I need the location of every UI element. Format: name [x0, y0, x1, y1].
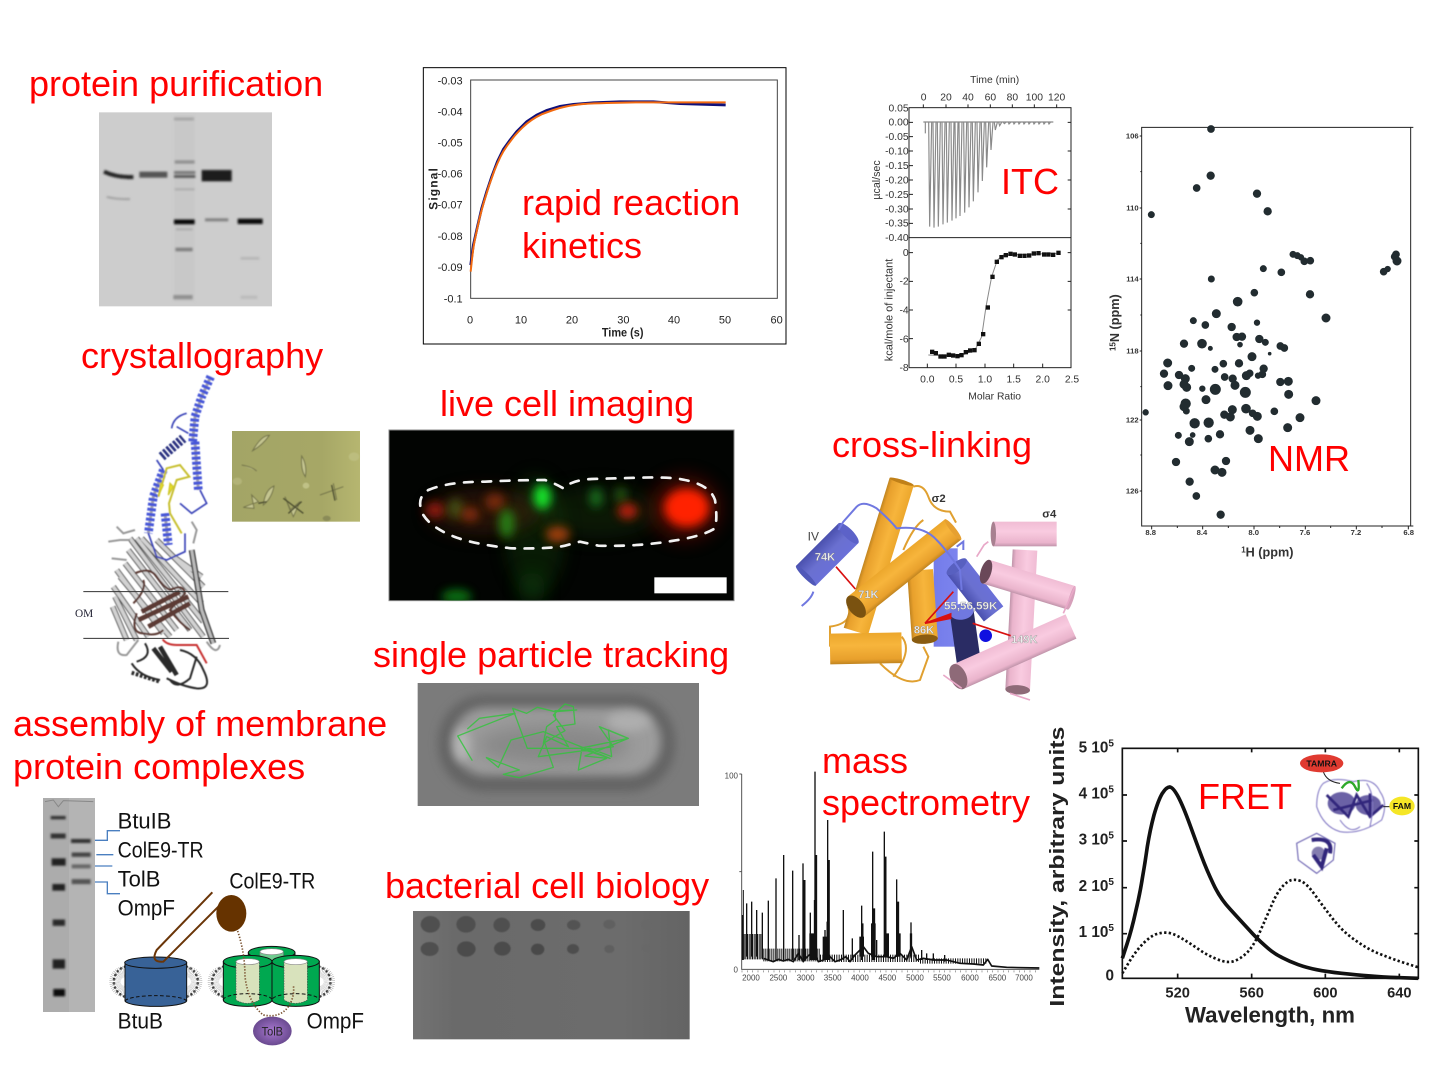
panel: rapid reaction kinetics chart: -0.07	[438, 200, 463, 212]
heading: crystallography: crystallography	[81, 335, 323, 376]
panel: rapid reaction kinetics chart: 50	[719, 314, 731, 326]
axis tick labels: 3 10	[1079, 831, 1108, 848]
panel: mass spectrum: 3000	[797, 974, 815, 983]
panel: mass spectrum: 5500	[933, 974, 951, 983]
panel: FRET emission spectra	[1047, 727, 1418, 1028]
panel: crystal structure ribbon	[75, 377, 229, 688]
panel: NMR HSQC spectrum: 106	[1126, 132, 1139, 141]
TolB	[253, 1017, 292, 1045]
panel: mass spectrum: 7000	[1015, 974, 1033, 983]
panel: ITC thermogram and binding isotherm: 0	[903, 248, 909, 259]
panel: mass spectrum: 100	[725, 772, 739, 781]
panel: NMR HSQC spectrum: 114	[1126, 275, 1139, 284]
panel: NMR HSQC spectrum: 118	[1126, 347, 1139, 356]
loop: yellow	[158, 465, 189, 533]
axis tick labels: 2 10	[1079, 878, 1108, 895]
axis tick labels: 4 10	[1079, 786, 1108, 803]
heading: assembly of membrane protein complexes: protein complexes	[13, 746, 305, 787]
panel: single particle tracking image	[418, 683, 699, 806]
panel: rapid reaction kinetics chart: 10	[515, 314, 527, 326]
panel: ITC thermogram and binding isotherm: kcal/mole of injectant	[883, 259, 895, 361]
panel: ITC thermogram and binding isotherm: 120	[1048, 93, 1066, 104]
BtuB barrel	[125, 957, 187, 1006]
domain: black lower	[132, 643, 207, 688]
panel: rapid reaction kinetics chart: -0.06	[438, 169, 463, 181]
TolB: TolB	[262, 1025, 283, 1039]
barrel: grey beta strands	[108, 522, 220, 655]
axis tick labels: 5	[1108, 877, 1114, 888]
curve: donor plus acceptor	[1122, 880, 1418, 973]
band labels: BtuIB	[118, 809, 171, 834]
panel: NMR HSQC spectrum: 8.4	[1197, 528, 1208, 537]
linker loop: blue	[802, 504, 963, 606]
panel: mass spectrum: 6000	[961, 974, 979, 983]
heading: bacterial cell biology: bacterial cell biology	[385, 865, 709, 906]
panel: NMR HSQC spectrum: 7.6	[1300, 528, 1310, 537]
band labels: OmpF	[118, 895, 175, 920]
residue labels: 149K	[1011, 634, 1038, 646]
panel: rapid reaction kinetics chart: 20	[566, 314, 578, 326]
panel: live cell fluorescence image	[389, 430, 734, 605]
residue labels: 74K	[815, 551, 835, 563]
panel: NMR HSQC spectrum: 126	[1126, 487, 1139, 496]
x axis title: Wavelength, nm	[1185, 1003, 1355, 1028]
panel: rapid reaction kinetics chart: 30	[617, 314, 629, 326]
axis title: 1H: H (ppm)	[1246, 546, 1293, 560]
panel: ITC thermogram and binding isotherm: 2.5	[1065, 375, 1079, 386]
helices: blue	[148, 377, 211, 560]
panel: mass spectrum: 2000	[742, 974, 760, 983]
y axis title: Intensity, arbitrary units	[1047, 727, 1069, 1007]
cylinders	[794, 476, 1077, 695]
panel: NMR HSQC spectrum: 8.0	[1248, 528, 1259, 537]
heading: ITC: ITC	[1001, 161, 1059, 202]
panel: crystals micrograph	[232, 431, 360, 522]
panel: ITC thermogram and binding isotherm: -0.35	[885, 219, 909, 230]
panel: ITC thermogram and binding isotherm: -0.05	[885, 132, 909, 143]
panel: NMR HSQC spectrum	[1108, 126, 1415, 560]
spectrum trace	[742, 772, 1039, 968]
panel: mass spectrum: 2500	[769, 974, 788, 983]
curve: donor only	[1122, 787, 1418, 978]
panel: cross-linking cylinder model: σ4	[1042, 508, 1057, 520]
panel: ITC thermogram and binding isotherm: -0.25	[885, 190, 909, 201]
axis title: signal: Signal	[426, 168, 440, 210]
panel: NMR HSQC spectrum: 6.8	[1403, 528, 1415, 537]
panel: mass spectrum: 0	[734, 966, 739, 975]
axis tick labels: 5	[1108, 739, 1114, 750]
membrane lines	[83, 592, 229, 638]
plug: brown domain	[133, 571, 190, 634]
panel: rapid reaction kinetics chart: -0.05	[438, 138, 463, 150]
particle trajectory	[458, 704, 628, 778]
axis title: time: Time (s)	[602, 325, 644, 339]
panel: membrane complex schematic	[95, 809, 364, 1045]
heading: cross-linking: cross-linking	[832, 424, 1032, 465]
panel: NMR HSQC spectrum: 8.8	[1145, 528, 1157, 537]
panel: ITC thermogram and binding isotherm: 0.5	[949, 375, 963, 386]
band labels	[118, 809, 364, 1034]
axis tick labels: 5	[1108, 923, 1114, 934]
panel: ITC thermogram and binding isotherm: -4	[899, 305, 909, 316]
axis title: 15N: N (ppm)	[1108, 294, 1122, 342]
trace: injection peaks	[923, 122, 1053, 228]
panel: rapid reaction kinetics chart: -0.03	[438, 75, 463, 87]
panel: rapid reaction kinetics chart	[423, 68, 786, 344]
crosslinks: red	[836, 567, 1011, 636]
panel: mass spectrum: 6500	[988, 974, 1007, 983]
heading: single particle tracking: single particle tracking	[373, 634, 729, 675]
panel: protein purification gel	[99, 112, 272, 306]
panel: mass spectrum: 4000	[851, 974, 869, 983]
panel: ITC thermogram and binding isotherm: 80	[1007, 93, 1018, 104]
panel: ITC thermogram and binding isotherm: 60	[985, 93, 996, 104]
panel: cross-linking cylinder model	[794, 476, 1077, 700]
panel: ITC thermogram and binding isotherm: -0.40	[885, 233, 909, 244]
gel band leader lines	[95, 831, 120, 894]
panel: mass spectrum: 4500	[878, 974, 897, 983]
cell body	[438, 695, 675, 792]
panel: ITC thermogram and binding isotherm: Time (min)	[970, 75, 1019, 86]
panel: cross-linking cylinder model: σ2	[932, 493, 946, 505]
peaks	[1143, 126, 1401, 518]
panel: ITC thermogram and binding isotherm: 0.00	[889, 118, 909, 129]
residue labels	[815, 551, 1038, 646]
panel: ITC thermogram and binding isotherm: 2.0	[1035, 375, 1050, 386]
axis tick labels: 5 10	[1079, 740, 1108, 757]
axis tick labels	[1079, 739, 1114, 985]
panel: ITC thermogram and binding isotherm: µcal/sec	[871, 160, 883, 200]
scale bar	[654, 577, 727, 593]
helix labels: IV	[808, 530, 819, 544]
heading: NMR: NMR	[1268, 438, 1350, 479]
panel: rapid reaction kinetics chart: -0.04	[438, 106, 463, 118]
heading: rapid reaction kinetics: kinetics	[522, 225, 642, 266]
panel: ITC thermogram and binding isotherm: -0.10	[885, 147, 909, 158]
panel: ITC thermogram and binding isotherm: -6	[899, 334, 909, 345]
heading: mass spectrometry: spectrometry	[822, 782, 1030, 823]
axis tick labels: 1 10	[1079, 924, 1108, 941]
spots	[421, 916, 652, 957]
band labels: ColE9-TR	[229, 869, 315, 894]
panel: NMR HSQC spectrum: 110	[1126, 204, 1139, 213]
residue labels: 55,56,59K	[944, 600, 997, 612]
ColE9-TR head	[216, 895, 246, 932]
panel: ITC thermogram and binding isotherm: -0.15	[885, 161, 909, 172]
ColE9-TR rod	[154, 892, 222, 962]
panel: FRET emission spectra: 600	[1313, 985, 1338, 1001]
panel: ITC thermogram and binding isotherm: -0.20	[885, 175, 909, 186]
panel: NMR HSQC spectrum: 7.2	[1351, 528, 1361, 537]
label: OM: OM	[75, 608, 93, 620]
panel: assembly gel	[43, 798, 95, 1012]
residue labels: 86K	[914, 624, 934, 636]
heading: protein purification: protein purification	[29, 63, 323, 104]
panel: ITC thermogram and binding isotherm: 20	[940, 93, 952, 104]
blue sphere	[979, 629, 992, 642]
panel: ITC thermogram and binding isotherm: Molar Ratio	[968, 391, 1021, 402]
panel: rapid reaction kinetics chart: -0.09	[438, 262, 463, 274]
axis title: 15N: 15	[1109, 342, 1118, 351]
curve: fit	[471, 102, 726, 272]
curve: raw data	[471, 102, 726, 265]
panel: rapid reaction kinetics chart: 0	[467, 314, 473, 326]
panel: ITC thermogram and binding isotherm	[871, 75, 1079, 402]
cell outline	[420, 477, 716, 548]
band labels: TolB	[118, 866, 160, 891]
lipids around BtuB and OmpF	[114, 967, 330, 997]
linker: red	[163, 639, 207, 663]
protein structure with dyes: TAMRA	[1306, 758, 1338, 768]
heading: FRET: FRET	[1198, 776, 1292, 817]
red and green signal	[425, 475, 722, 605]
panel: rapid reaction kinetics chart: -0.1	[444, 294, 463, 306]
panel: rapid reaction kinetics chart: 40	[668, 314, 680, 326]
data points: isotherm	[930, 251, 1061, 359]
panel: rapid reaction kinetics chart: 60	[771, 314, 783, 326]
residue labels: 71K	[858, 589, 878, 601]
panel: bacterial cell biology plate	[413, 911, 690, 1039]
heading: assembly of membrane protein complexes: assembly of membrane	[13, 703, 387, 744]
panel: ITC thermogram and binding isotherm: -2	[899, 277, 909, 288]
heading: mass spectrometry: mass	[822, 740, 908, 781]
panel: FRET emission spectra: 520	[1165, 985, 1190, 1001]
axis tick labels: 0	[1105, 968, 1114, 985]
panel: ITC thermogram and binding isotherm: 0.0	[920, 375, 935, 386]
panel: ITC thermogram and binding isotherm: -0.30	[885, 204, 909, 215]
protein structure with dyes	[1297, 754, 1415, 873]
dotted linker	[238, 931, 294, 1016]
band labels: ColE9-TR	[118, 837, 204, 862]
trace: isotherm fit	[928, 253, 1057, 356]
panel: ITC thermogram and binding isotherm: 100	[1026, 93, 1043, 104]
band labels: OmpF	[307, 1009, 364, 1034]
heading: rapid reaction kinetics	[522, 182, 740, 266]
panel: ITC thermogram and binding isotherm: 1.0	[978, 375, 992, 386]
panel: ITC thermogram and binding isotherm: 0	[921, 93, 927, 104]
panel: mass spectrum: 3500	[824, 974, 842, 983]
axis tick labels: 5	[1108, 830, 1114, 841]
OmpF trimer	[223, 946, 319, 1006]
panel: FRET emission spectra: 560	[1239, 985, 1264, 1001]
panel: ITC thermogram and binding isotherm: 1.5	[1006, 375, 1021, 386]
band labels: BtuB	[118, 1009, 163, 1034]
panel: mass spectrum	[725, 772, 1039, 983]
protein structure with dyes: FAM	[1393, 801, 1411, 811]
panel: FRET emission spectra: 640	[1387, 985, 1412, 1001]
heading: assembly of membrane protein complexes	[13, 703, 387, 787]
loops	[830, 486, 956, 681]
panel: ITC thermogram and binding isotherm: 0.05	[889, 103, 909, 114]
heading: rapid reaction kinetics: rapid reaction	[522, 182, 740, 223]
axis tick labels: 5	[1108, 785, 1114, 796]
heading: mass spectrometry	[822, 740, 1030, 823]
panel: rapid reaction kinetics chart: -0.08	[438, 231, 463, 243]
panel: mass spectrum: 5000	[906, 974, 924, 983]
panel: NMR HSQC spectrum: 122	[1126, 416, 1139, 425]
panel: ITC thermogram and binding isotherm: -8	[899, 363, 909, 374]
axis title: 1H: 1	[1241, 546, 1246, 555]
heading: live cell imaging: live cell imaging	[440, 383, 694, 424]
panel: ITC thermogram and binding isotherm: 40	[962, 93, 974, 104]
